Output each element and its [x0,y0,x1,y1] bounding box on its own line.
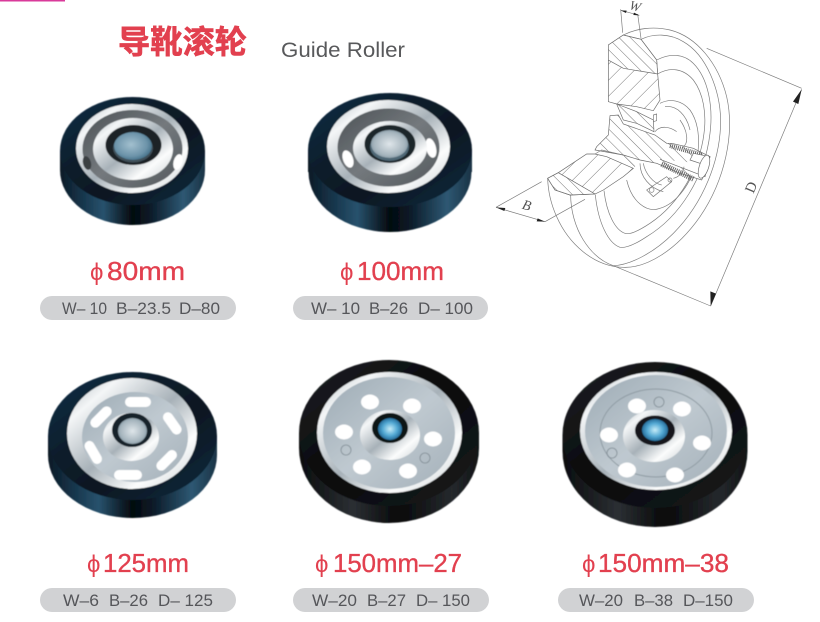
dimension D: D [742,180,761,196]
spec pill: 100mm: W– 10 [311,299,360,318]
dimension D [613,48,802,306]
label: 150mm-27: 150mm–27 [333,548,462,578]
label: 80mm: 80mm [107,256,185,286]
label: 100mm: 100mm [357,256,444,286]
spec pill: 150mm-27: W–20 [312,591,357,610]
top accent bar [0,0,65,2]
spec pill: 150mm-27: B–27 [367,591,406,610]
hatched section [548,35,710,195]
label: 125mm: ϕ [87,551,100,578]
spec pill: 150mm-38: B–38 [634,591,673,610]
label: 150mm-38: 150mm–38 [598,548,729,578]
tyre contour lines [548,28,730,267]
label: 150mm-27: ϕ [315,551,328,578]
spec pill: 100mm: B–26 [369,299,408,318]
spec pill: 150mm-27: D– 150 [416,591,470,610]
spec pill: 150mm-27 [293,588,489,612]
dimension B: B [520,198,533,215]
spec pill: 100mm [293,296,488,320]
roller cutaway diagram [496,0,802,306]
roller photo: 125mm [48,372,217,518]
spec pill: 125mm [40,588,236,612]
title [118,24,405,62]
label: 125mm: 125mm [103,548,189,578]
spec pill: 80mm: W– 10 [62,299,107,318]
roller photo: 150mm-27 [299,360,479,523]
label: 150mm-38: ϕ [582,551,595,578]
roller photo: 100mm [308,93,472,232]
threaded shaft [660,146,712,180]
spec pill: 80mm: D–80 [179,299,220,318]
spec pill: 150mm-38 [558,588,754,612]
spec pill: 150mm-38: D–150 [683,591,733,610]
label: 100mm: ϕ [340,259,353,286]
spec pill: 80mm: B–23.5 [116,299,171,318]
spec pill: 125mm: B–26 [109,591,148,610]
bearing detail [640,114,687,197]
spec pill: 125mm: W–6 [63,591,99,610]
spec pill: 80mm [40,296,236,320]
spec pill: 150mm-38: W–20 [579,591,623,610]
dimension W [621,0,644,38]
title: 导靴滚轮 [118,24,247,60]
dimension B [496,182,585,222]
spec pill: 125mm: D– 125 [158,591,213,610]
spec pill: 100mm: D– 100 [418,299,473,318]
roller photo: 80mm [60,97,205,225]
roller photo: 150mm-38 [562,362,748,527]
label: 80mm: ϕ [90,259,103,286]
title: Guide Roller [281,39,405,62]
